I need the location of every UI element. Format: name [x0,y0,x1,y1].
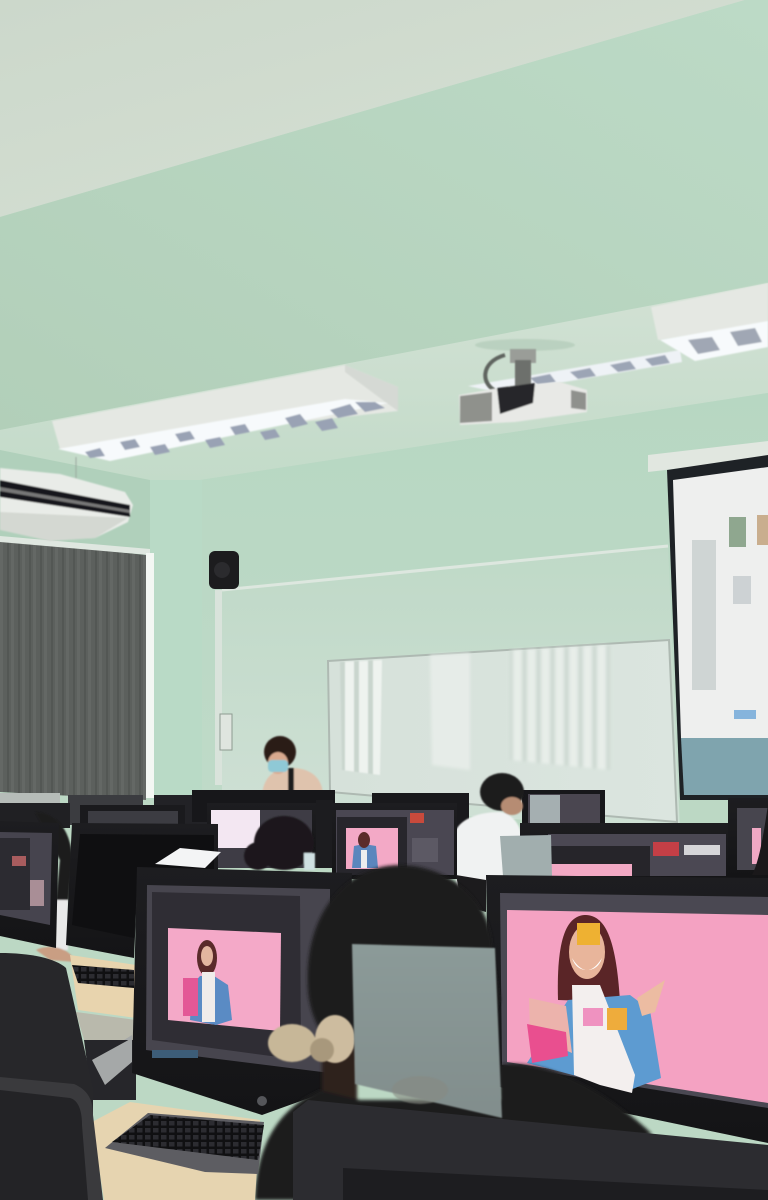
presenter [262,736,323,795]
student with ponytail [244,816,315,870]
ceiling light far strip [468,350,682,393]
grey card [352,944,502,1118]
monitor with portrait, back middle [332,803,457,879]
monitor at right edge [728,798,768,878]
whiteboard [328,640,677,822]
front desk with keyboard [92,1102,264,1200]
front monitor back right [293,1100,768,1200]
back row monitors [0,790,605,835]
man dark strip behind center monitor [456,875,486,912]
back wall lower section and rail [215,546,680,830]
monitor with white window [207,800,333,868]
projector with ceiling mount [459,339,587,425]
student behind left monitor [35,812,76,962]
left monitor [0,821,59,948]
projection screen [648,441,768,800]
monitor far right, screen strip [500,823,732,879]
large right monitor with portrait [486,875,768,1143]
air conditioner [0,457,133,541]
front monitor back left [0,1077,103,1200]
center monitor with portrait [132,867,352,1115]
ceiling beam face [0,0,768,430]
back wall upper [0,393,768,800]
speaker [209,551,239,589]
student from behind: hair and dark top [255,865,652,1200]
ceiling [0,0,745,217]
front chair left [0,953,93,1200]
left desk with keyboard [70,955,136,1100]
lower ceiling soffit [0,283,768,480]
window blinds [0,536,154,800]
ceiling light right [651,283,768,361]
seated person in white shirt [456,773,524,895]
dark off monitor [66,823,221,958]
scrunchie [268,1015,355,1063]
ceiling light near [52,365,398,461]
